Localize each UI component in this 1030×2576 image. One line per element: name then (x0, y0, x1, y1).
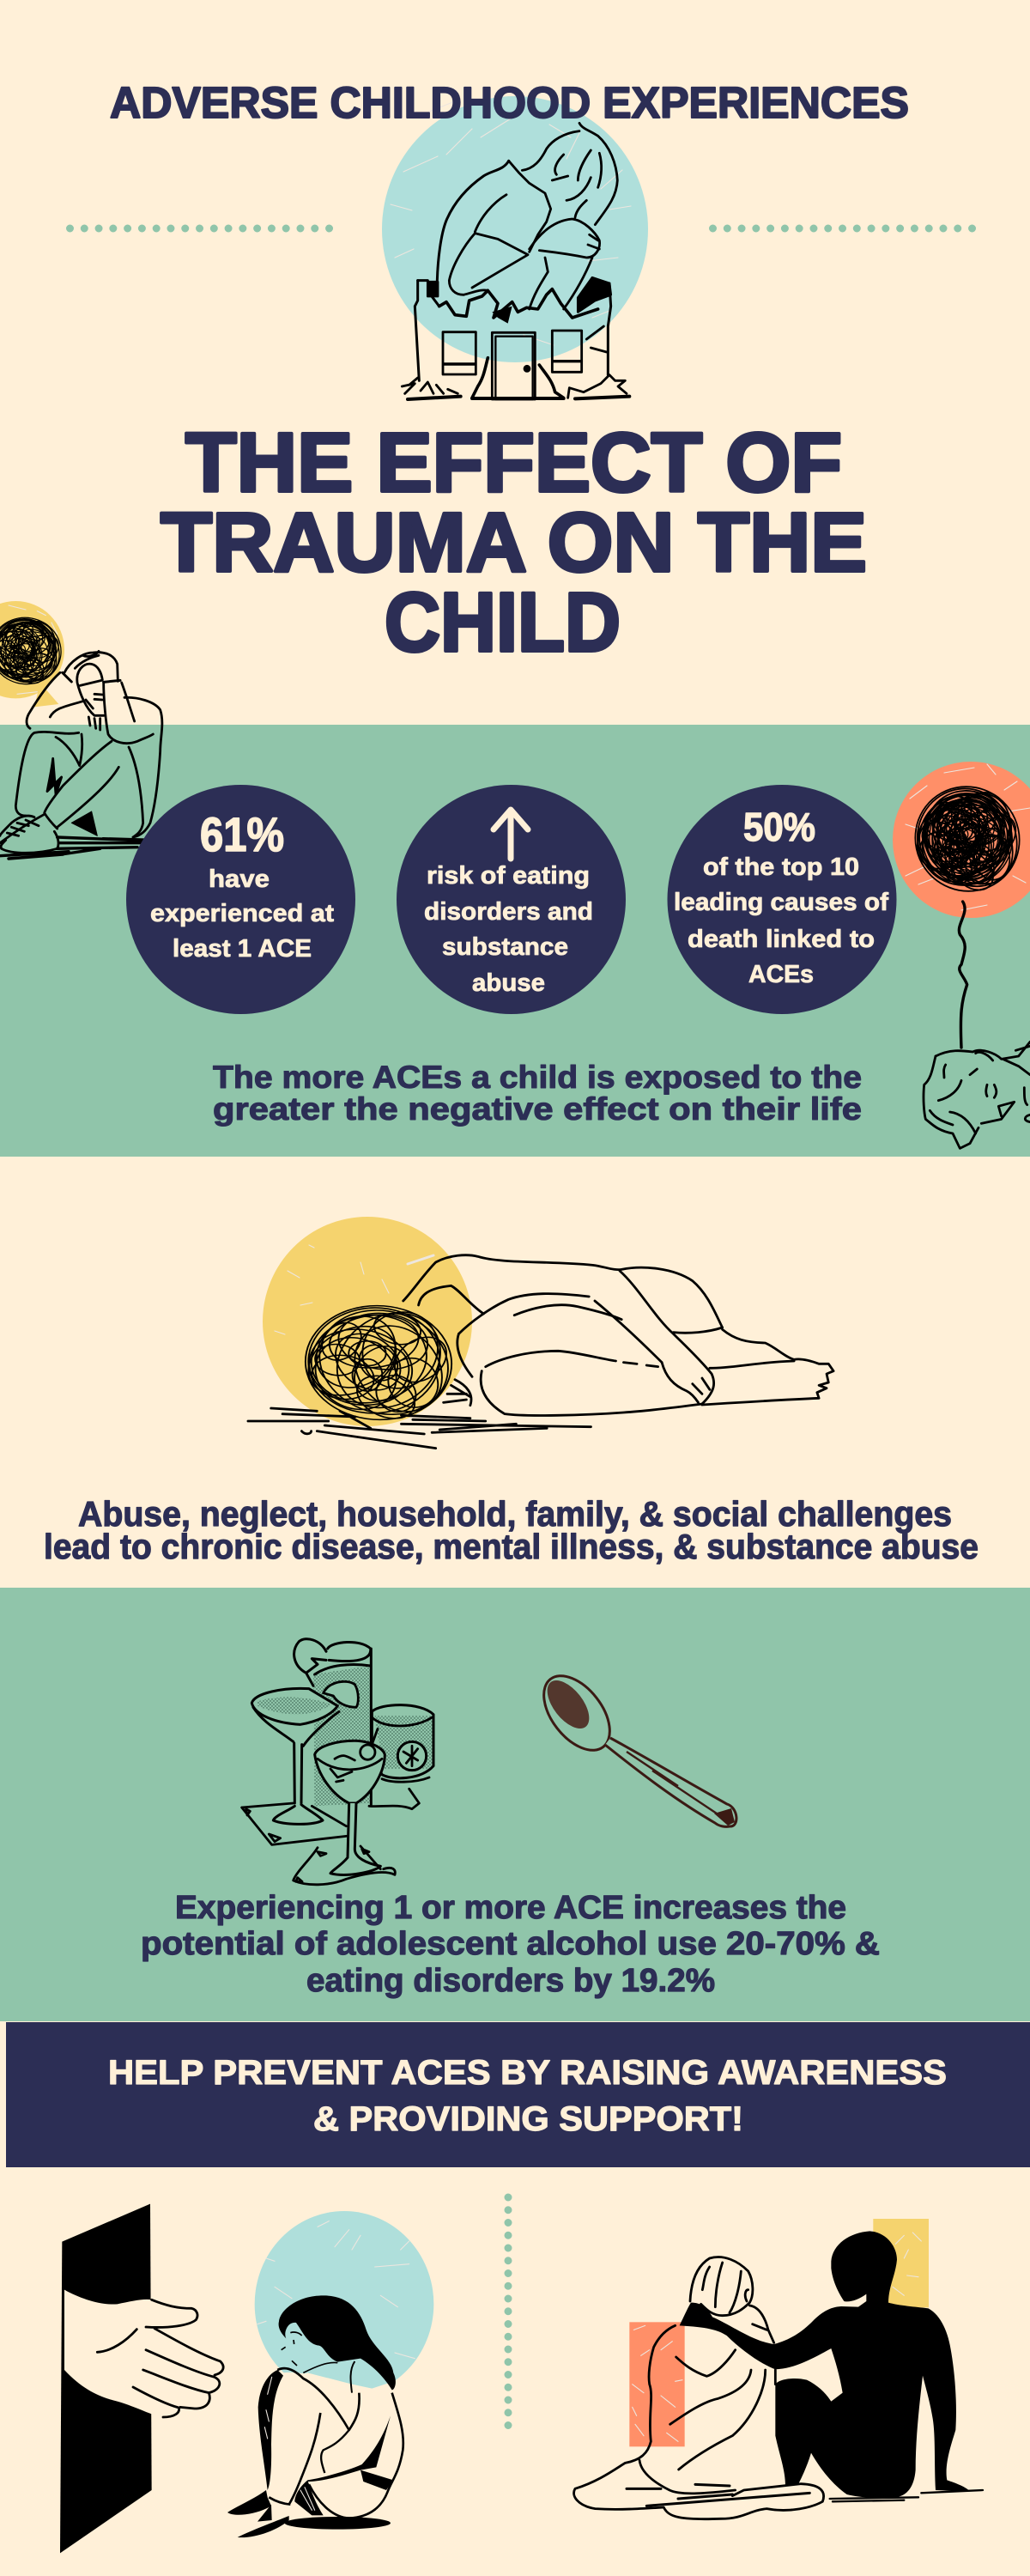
stat caption: disorders and (424, 898, 593, 926)
text: call to action: & PROVIDING SUPPORT! (313, 2100, 743, 2138)
icon: dotted divider left (70, 225, 330, 232)
icon: dotted divider right (712, 225, 973, 232)
napkin under glasses (242, 1803, 346, 1844)
text: alcohol and eating disorders statement (141, 1890, 880, 1999)
figure outline (0, 651, 166, 859)
heading: the effect of trauma on the child (161, 416, 867, 669)
ground shadow (830, 2490, 983, 2501)
illustration: wooden spoon (530, 1664, 736, 1826)
icon: vertical dotted divider (505, 2197, 512, 2426)
stat circle: 61 percent (126, 785, 355, 1014)
ground shadow strokes (248, 1408, 591, 1449)
figure: girl hugging knees (227, 2295, 403, 2537)
stat caption: of the top 10 (703, 854, 859, 881)
head outline and string (924, 902, 1030, 1148)
icon: coral block (629, 2322, 685, 2446)
icon: scribble ball (0, 597, 82, 708)
stat caption: risk of eating (427, 862, 590, 890)
text: abuse and neglect statement: lead to chronic disease, mental illness, & substance abuse (44, 1527, 978, 1566)
icon: yellow circle (263, 1217, 472, 1426)
stat caption: ACEs (748, 961, 814, 988)
text: alcohol and eating disorders statement: eating disorders by 19.2% (306, 1963, 715, 1999)
icon: blue circle behind house (382, 96, 648, 362)
icon: yellow block (873, 2219, 929, 2307)
small glass with lime (369, 1705, 433, 1809)
panel: green statistics band (0, 725, 1030, 1157)
illustration: silhouette comforting a friend (574, 2219, 983, 2519)
stat caption: experienced at (150, 900, 334, 927)
illustration: head with tangled balloon (891, 761, 1030, 1148)
figure: blanket wrapped friend (574, 2257, 824, 2519)
icon: coral circle (893, 762, 1030, 918)
heading: adverse childhood experiences: ADVERSE CHILDHOOD EXPERIENCES (110, 78, 909, 127)
text: call to action: HELP PREVENT ACES BY RAISING AWARENESS (108, 2054, 947, 2092)
body outline (403, 1255, 833, 1415)
text: more ACEs statement: The more ACEs a child is exposed to the (213, 1060, 862, 1095)
icon: tangled hair (292, 1289, 474, 1436)
text: call to action (108, 2054, 947, 2138)
icon: reaching hand (64, 2290, 223, 2417)
martini glass (251, 1688, 339, 1824)
panel: green alcohol band (0, 1588, 1030, 2021)
illustration: child crouching on house (402, 123, 629, 399)
stat caption: death linked to (688, 926, 875, 953)
icon: tangled scribble (891, 761, 1030, 920)
stat number: 50% (743, 805, 815, 849)
stat caption: abuse (472, 969, 545, 997)
text: alcohol and eating disorders statement: potential of adolescent alcohol use 20-70% & (141, 1926, 880, 1962)
icon: up arrow (494, 810, 528, 859)
stat caption (674, 854, 888, 988)
illustration: helping hand and girl (60, 2204, 433, 2553)
illustration: figure lying on the floor (248, 1217, 833, 1449)
tall glass (294, 1639, 371, 1806)
figure: black silhouette (680, 2231, 970, 2498)
text: more ACEs statement (213, 1060, 862, 1127)
illustration: cocktail glasses (242, 1639, 433, 1885)
stat circle: 50 percent (668, 785, 896, 1014)
text: more ACEs statement: greater the negative effect on their life (213, 1091, 862, 1127)
illustration: distressed teen with scribble thought (0, 597, 166, 859)
stat number: 61% (200, 807, 284, 861)
stat circle: elevated risk (397, 785, 626, 1014)
stat caption (150, 866, 334, 963)
title line 2: TRAUMA ON THE (161, 495, 867, 589)
text: alcohol and eating disorders statement: Experiencing 1 or more ACE increases the (175, 1890, 846, 1926)
front glass (294, 1728, 395, 1885)
icon: yellow thought bubble (0, 601, 64, 707)
icon: blue circle behind girl (255, 2211, 433, 2397)
title line 3: CHILD (385, 575, 621, 669)
text: abuse and neglect statement: Abuse, neglect, household, family, & social challenges (78, 1494, 952, 1534)
panel: call to action banner (6, 2022, 1030, 2167)
stat caption: leading causes of (674, 889, 888, 916)
stat caption: have (209, 866, 270, 893)
stat caption: substance (442, 933, 568, 961)
icon: black doorway (60, 2204, 152, 2553)
stat caption: least 1 ACE (173, 935, 312, 963)
stat caption (424, 862, 593, 997)
text: abuse and neglect statement (44, 1494, 978, 1566)
title line 1: THE EFFECT OF (185, 416, 842, 509)
